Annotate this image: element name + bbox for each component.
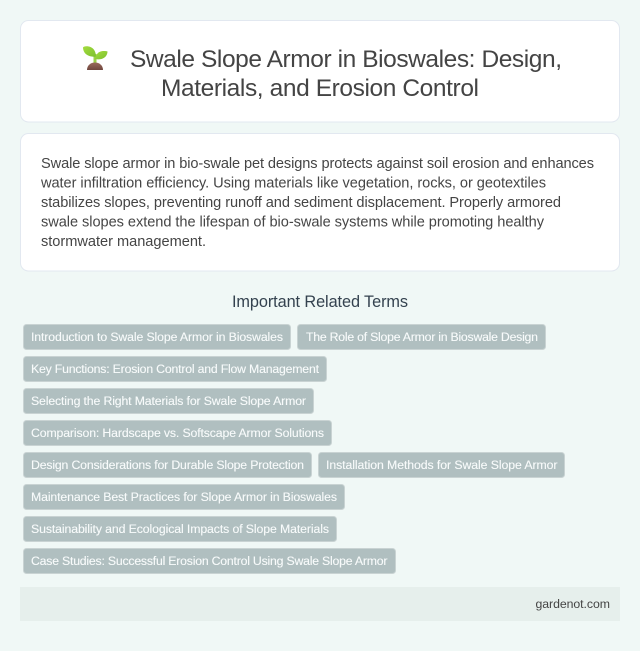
footer xyxy=(20,587,620,621)
tag group: related terms xyxy=(24,324,564,574)
tag: case studies xyxy=(24,548,396,574)
tag: design considerations: Design Considerations for Durable Slope Protection xyxy=(31,458,304,472)
tag: selecting materials: Selecting the Right Materials for Swale Slope Armor xyxy=(31,394,306,408)
tag: introduction: Introduction to Swale Slope Armor in Bioswales xyxy=(31,330,283,344)
tag: comparison: Comparison: Hardscape vs. Softscape Armor Solutions xyxy=(31,426,324,440)
tag: installation methods: Installation Methods for Swale Slope Armor xyxy=(326,458,558,472)
tag: sustainability xyxy=(24,516,336,542)
tag: introduction xyxy=(24,324,290,350)
tag: maintenance xyxy=(24,484,344,510)
icon: sprout xyxy=(83,46,108,70)
text block: description xyxy=(40,156,594,250)
footer: gardenot.com xyxy=(536,597,610,611)
tag: key functions xyxy=(24,356,326,382)
tag: installation methods xyxy=(318,452,564,478)
panel: description card xyxy=(20,134,620,271)
title: Swale Slope Armor in Bioswales: Design, xyxy=(130,46,562,73)
title: Materials, and Erosion Control xyxy=(161,75,479,102)
title xyxy=(130,46,562,102)
tag: selecting materials xyxy=(24,388,314,414)
tag: role of slope armor: The Role of Slope Armor in Bioswale Design xyxy=(306,330,538,344)
tag: role of slope armor xyxy=(298,324,546,350)
text block: description: stormwater management. xyxy=(41,234,206,250)
tag: case studies: Case Studies: Successful Erosion Control Using Swale Slope Armor xyxy=(31,554,388,568)
tag: sustainability: Sustainability and Ecological Impacts of Slope Materials xyxy=(31,522,329,536)
tag: design considerations xyxy=(24,452,312,478)
tag: key functions: Key Functions: Erosion Control and Flow Management xyxy=(31,362,320,376)
panel: title card xyxy=(20,20,620,122)
text block: description: stabilizes slopes, preventing runoff and sediment displacement. Properly armored xyxy=(41,195,561,211)
text block: description: water infiltration efficiency. Using materials like vegetation, rocks, or geotextiles xyxy=(40,176,546,192)
heading: important related terms: Important Related Terms xyxy=(232,293,408,311)
text block: description: swale slopes extend the lifespan of bio-swale systems while promoting healthy xyxy=(41,214,545,230)
tag: comparison xyxy=(24,420,332,446)
tag: maintenance: Maintenance Best Practices for Slope Armor in Bioswales xyxy=(31,490,337,504)
text block: description: Swale slope armor in bio-swale pet designs protects against soil erosion and enhances xyxy=(41,156,594,172)
